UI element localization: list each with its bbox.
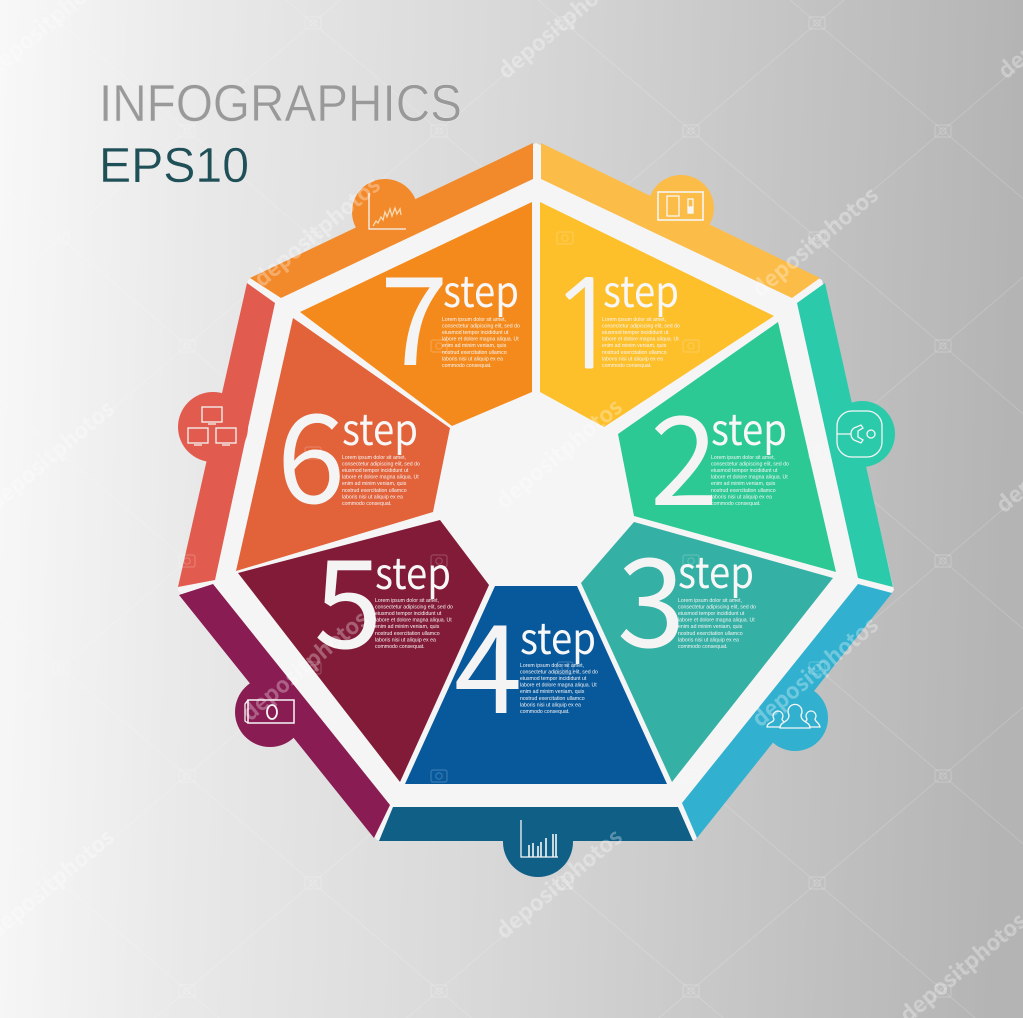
outer segment 1 with tablet icon — [541, 143, 820, 298]
body text 7: labore et dolore magna aliqua. Ut — [442, 337, 519, 343]
number 6: 6 — [277, 361, 345, 539]
body text 5: enim ad minim veniam, quis — [375, 624, 440, 630]
body text 3: Lorem ipsum dolor sit amet, — [678, 598, 742, 604]
body text 2: labore et dolore magna aliqua. Ut — [711, 475, 788, 481]
watermarks: depositphotos — [744, 608, 884, 733]
body text 7: Lorem ipsum dolor sit amet, — [442, 317, 506, 323]
outer segment 7 with line chart icon — [250, 143, 533, 298]
body text 2: enim ad minim veniam, quis — [711, 481, 776, 487]
body text 1: enim ad minim veniam, quis — [602, 343, 667, 349]
body text 6: labore et dolore magna aliqua. Ut — [342, 475, 419, 481]
number 1: 1 — [548, 263, 623, 386]
body text 4: enim ad minim veniam, quis — [520, 689, 585, 695]
step heading 4: step — [520, 605, 596, 667]
body text 5: eiusmod tempor incididunt ut — [375, 611, 442, 617]
body text 3: eiusmod tempor incididunt ut — [678, 611, 745, 617]
icon: wrench — [837, 411, 882, 457]
body text 6: commodo consequat. — [342, 501, 392, 507]
body text 6: eiusmod tempor incididunt ut — [342, 468, 409, 474]
body text 6: enim ad minim veniam, quis — [342, 481, 407, 487]
body text 1: consectetur adipiscing elit, sed do — [602, 324, 680, 330]
body text 4: consectetur adipiscing elit, sed do — [520, 670, 598, 676]
icon: network monitors — [188, 407, 236, 445]
body text 2: eiusmod tempor incididunt ut — [711, 468, 778, 474]
heptagon base — [178, 143, 894, 840]
body text 2: nostrud exercitation ullamco — [711, 488, 776, 494]
panel 3 — [581, 505, 833, 782]
body text 2: commodo consequat. — [711, 501, 761, 507]
body text 1: commodo consequat. — [602, 363, 652, 369]
body text 4: labore et dolore magna aliqua. Ut — [520, 683, 597, 689]
body text 4: nostrud exercitation ullamco — [520, 696, 585, 702]
icon: bar chart — [521, 820, 558, 857]
body text 4: eiusmod tempor incididunt ut — [520, 676, 587, 682]
watermarks: depositphotos — [488, 820, 628, 945]
watermarks: depositphotos — [246, 168, 386, 293]
body text 4: Lorem ipsum dolor sit amet, — [520, 663, 584, 669]
icon: line chart — [369, 193, 406, 229]
step heading 6: step — [342, 396, 418, 458]
body text 5: commodo consequat. — [375, 644, 425, 650]
body text 7: laboris nisi ut aliquip ex ea — [442, 356, 503, 362]
body text 7: eiusmod tempor incididunt ut — [442, 330, 509, 336]
body text 3: commodo consequat. — [678, 644, 728, 650]
outer segment 5 with banknote icon — [179, 584, 390, 838]
body text 5: labore et dolore magna aliqua. Ut — [375, 618, 452, 624]
body text 6: nostrud exercitation ullamco — [342, 488, 407, 494]
body text 5: Lorem ipsum dolor sit amet, — [375, 598, 439, 604]
watermarks: depositphotos — [488, 390, 628, 515]
outer segment 2 with wrench icon — [797, 283, 895, 587]
icon: banknote — [245, 700, 294, 723]
body text 2: Lorem ipsum dolor sit amet, — [711, 455, 775, 461]
watermarks: depositphotos — [744, 178, 884, 303]
panel 2 — [618, 322, 836, 572]
body text 1: eiusmod tempor incididunt ut — [602, 330, 669, 336]
body text 7: commodo consequat. — [442, 363, 492, 369]
body text 2: laboris nisi ut aliquip ex ea — [711, 494, 772, 500]
body text 6: laboris nisi ut aliquip ex ea — [342, 494, 403, 500]
outer segment 6 with network icon — [178, 283, 275, 587]
subtitle: EPS10 — [99, 139, 249, 193]
body text 2: consectetur adipiscing elit, sed do — [711, 462, 789, 468]
step heading 1: step — [603, 258, 679, 320]
icon: people — [767, 704, 820, 728]
body text 7: nostrud exercitation ullamco — [442, 350, 507, 356]
body text 5: nostrud exercitation ullamco — [375, 631, 440, 637]
body text 6: Lorem ipsum dolor sit amet, — [342, 455, 406, 461]
number 5: 5 — [314, 506, 382, 684]
title: INFOGRAPHICS — [99, 75, 462, 133]
step heading 2: step — [711, 396, 787, 458]
watermarks: depositphotos — [234, 602, 374, 727]
body text 3: laboris nisi ut aliquip ex ea — [678, 637, 739, 643]
icon: tablet — [658, 192, 703, 220]
body text 1: Lorem ipsum dolor sit amet, — [602, 317, 666, 323]
body text 6: consectetur adipiscing elit, sed do — [342, 462, 420, 468]
body text 5: consectetur adipiscing elit, sed do — [375, 605, 453, 611]
panel 6 — [236, 318, 450, 571]
body text 1: nostrud exercitation ullamco — [602, 350, 667, 356]
body text 1: laboris nisi ut aliquip ex ea — [602, 356, 663, 362]
body text 4: commodo consequat. — [520, 709, 570, 715]
body text 4: laboris nisi ut aliquip ex ea — [520, 702, 581, 708]
outer segment 4 with bar chart icon — [379, 807, 693, 877]
panel 1 — [540, 202, 774, 427]
panel 5 — [238, 506, 489, 782]
body text 3: labore et dolore magna aliqua. Ut — [678, 618, 755, 624]
body text 3: enim ad minim veniam, quis — [678, 624, 743, 630]
body text 5: laboris nisi ut aliquip ex ea — [375, 637, 436, 643]
number 2: 2 — [650, 363, 718, 541]
panel 7 — [300, 202, 532, 426]
outer segment 3 with people icon — [682, 584, 892, 838]
panel 4 — [405, 571, 667, 784]
body text 3: nostrud exercitation ullamco — [678, 631, 743, 637]
number 3: 3 — [617, 505, 685, 683]
step heading 3: step — [678, 539, 754, 601]
body text 3: consectetur adipiscing elit, sed do — [678, 605, 756, 611]
step heading 5: step — [375, 540, 451, 602]
number 4: 4 — [454, 571, 522, 749]
step heading 7: step — [443, 258, 519, 320]
number 7: 7 — [380, 223, 448, 401]
body text 7: consectetur adipiscing elit, sed do — [442, 324, 520, 330]
body text 1: labore et dolore magna aliqua. Ut — [602, 337, 679, 343]
body text 7: enim ad minim veniam, quis — [442, 343, 507, 349]
